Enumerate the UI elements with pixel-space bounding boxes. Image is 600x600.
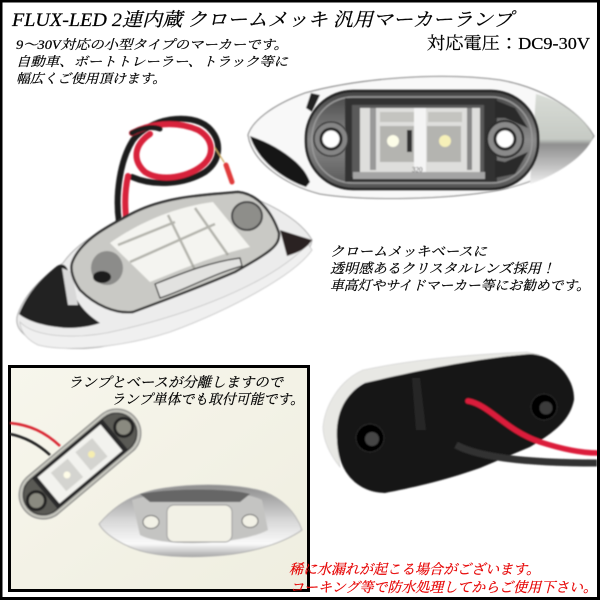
chrome base description [330,244,590,293]
intro text: 自動車、ボートトレーラー、トラック等に [16,54,289,69]
black wire [456,445,597,463]
red waterproofing warning: 稀に水漏れが起こる場合がございます。 [289,562,540,578]
dark reflection on chrome [19,264,100,328]
photo: lamp rear view [323,352,597,493]
lens facets [118,208,228,270]
intro text [16,37,289,86]
black back plate [337,354,574,493]
photo: chrome lamp, angled view [17,192,312,348]
angled lamp hole [91,251,123,285]
chrome base [17,193,312,348]
inset caption: ランプ単体でも取付可能です。 [111,392,304,408]
photo: wires of angled lamp [118,119,232,224]
red wire [468,401,597,453]
clear lens edge [323,352,540,467]
chrome base description: クロームメッキベースに [330,244,488,259]
right mounting hole [487,121,523,157]
left mounting hole [314,122,348,156]
chrome base description: 車高灯やサイドマーカー等にお勧めです。 [330,278,590,293]
chrome base [248,76,594,199]
photo: chrome lamp, front view [248,76,594,199]
clear lens: 320 [412,166,423,174]
red waterproofing warning: コーキング等で防水処理してからご使用下さい。 [290,580,597,596]
inset panel: separated lamp and base [9,366,308,590]
left screw [356,424,384,452]
plate sheen [412,378,426,430]
far hole [232,202,262,230]
inset caption: ランプとベースが分離しますので [68,375,284,391]
inset caption [68,375,304,408]
LED board [110,202,250,282]
intro text: 9～30V対応の小型タイプのマーカーです。 [16,37,288,52]
inset lamp body [9,399,151,529]
board edge text strip [155,258,242,298]
clear lens [71,192,279,312]
white streak on chrome [62,268,78,305]
title: FLUX-LED 2連内蔵 クロームメッキ 汎用マーカーランプ [11,10,517,31]
red waterproofing warning [289,562,597,596]
right screw [531,394,557,420]
inset chrome base [99,485,302,557]
clear lens [306,91,538,189]
chrome base description: 透明感あるクリスタルレンズ採用！ [330,261,555,276]
intro text: 幅広くご使用頂けます。 [16,71,166,86]
voltage label: 対応電圧：DC9-30V [427,34,591,53]
chrome lower rim [20,244,312,348]
panel frame [10,366,308,590]
inset lamp wires [10,423,60,455]
shadow in far end of base [280,230,312,256]
